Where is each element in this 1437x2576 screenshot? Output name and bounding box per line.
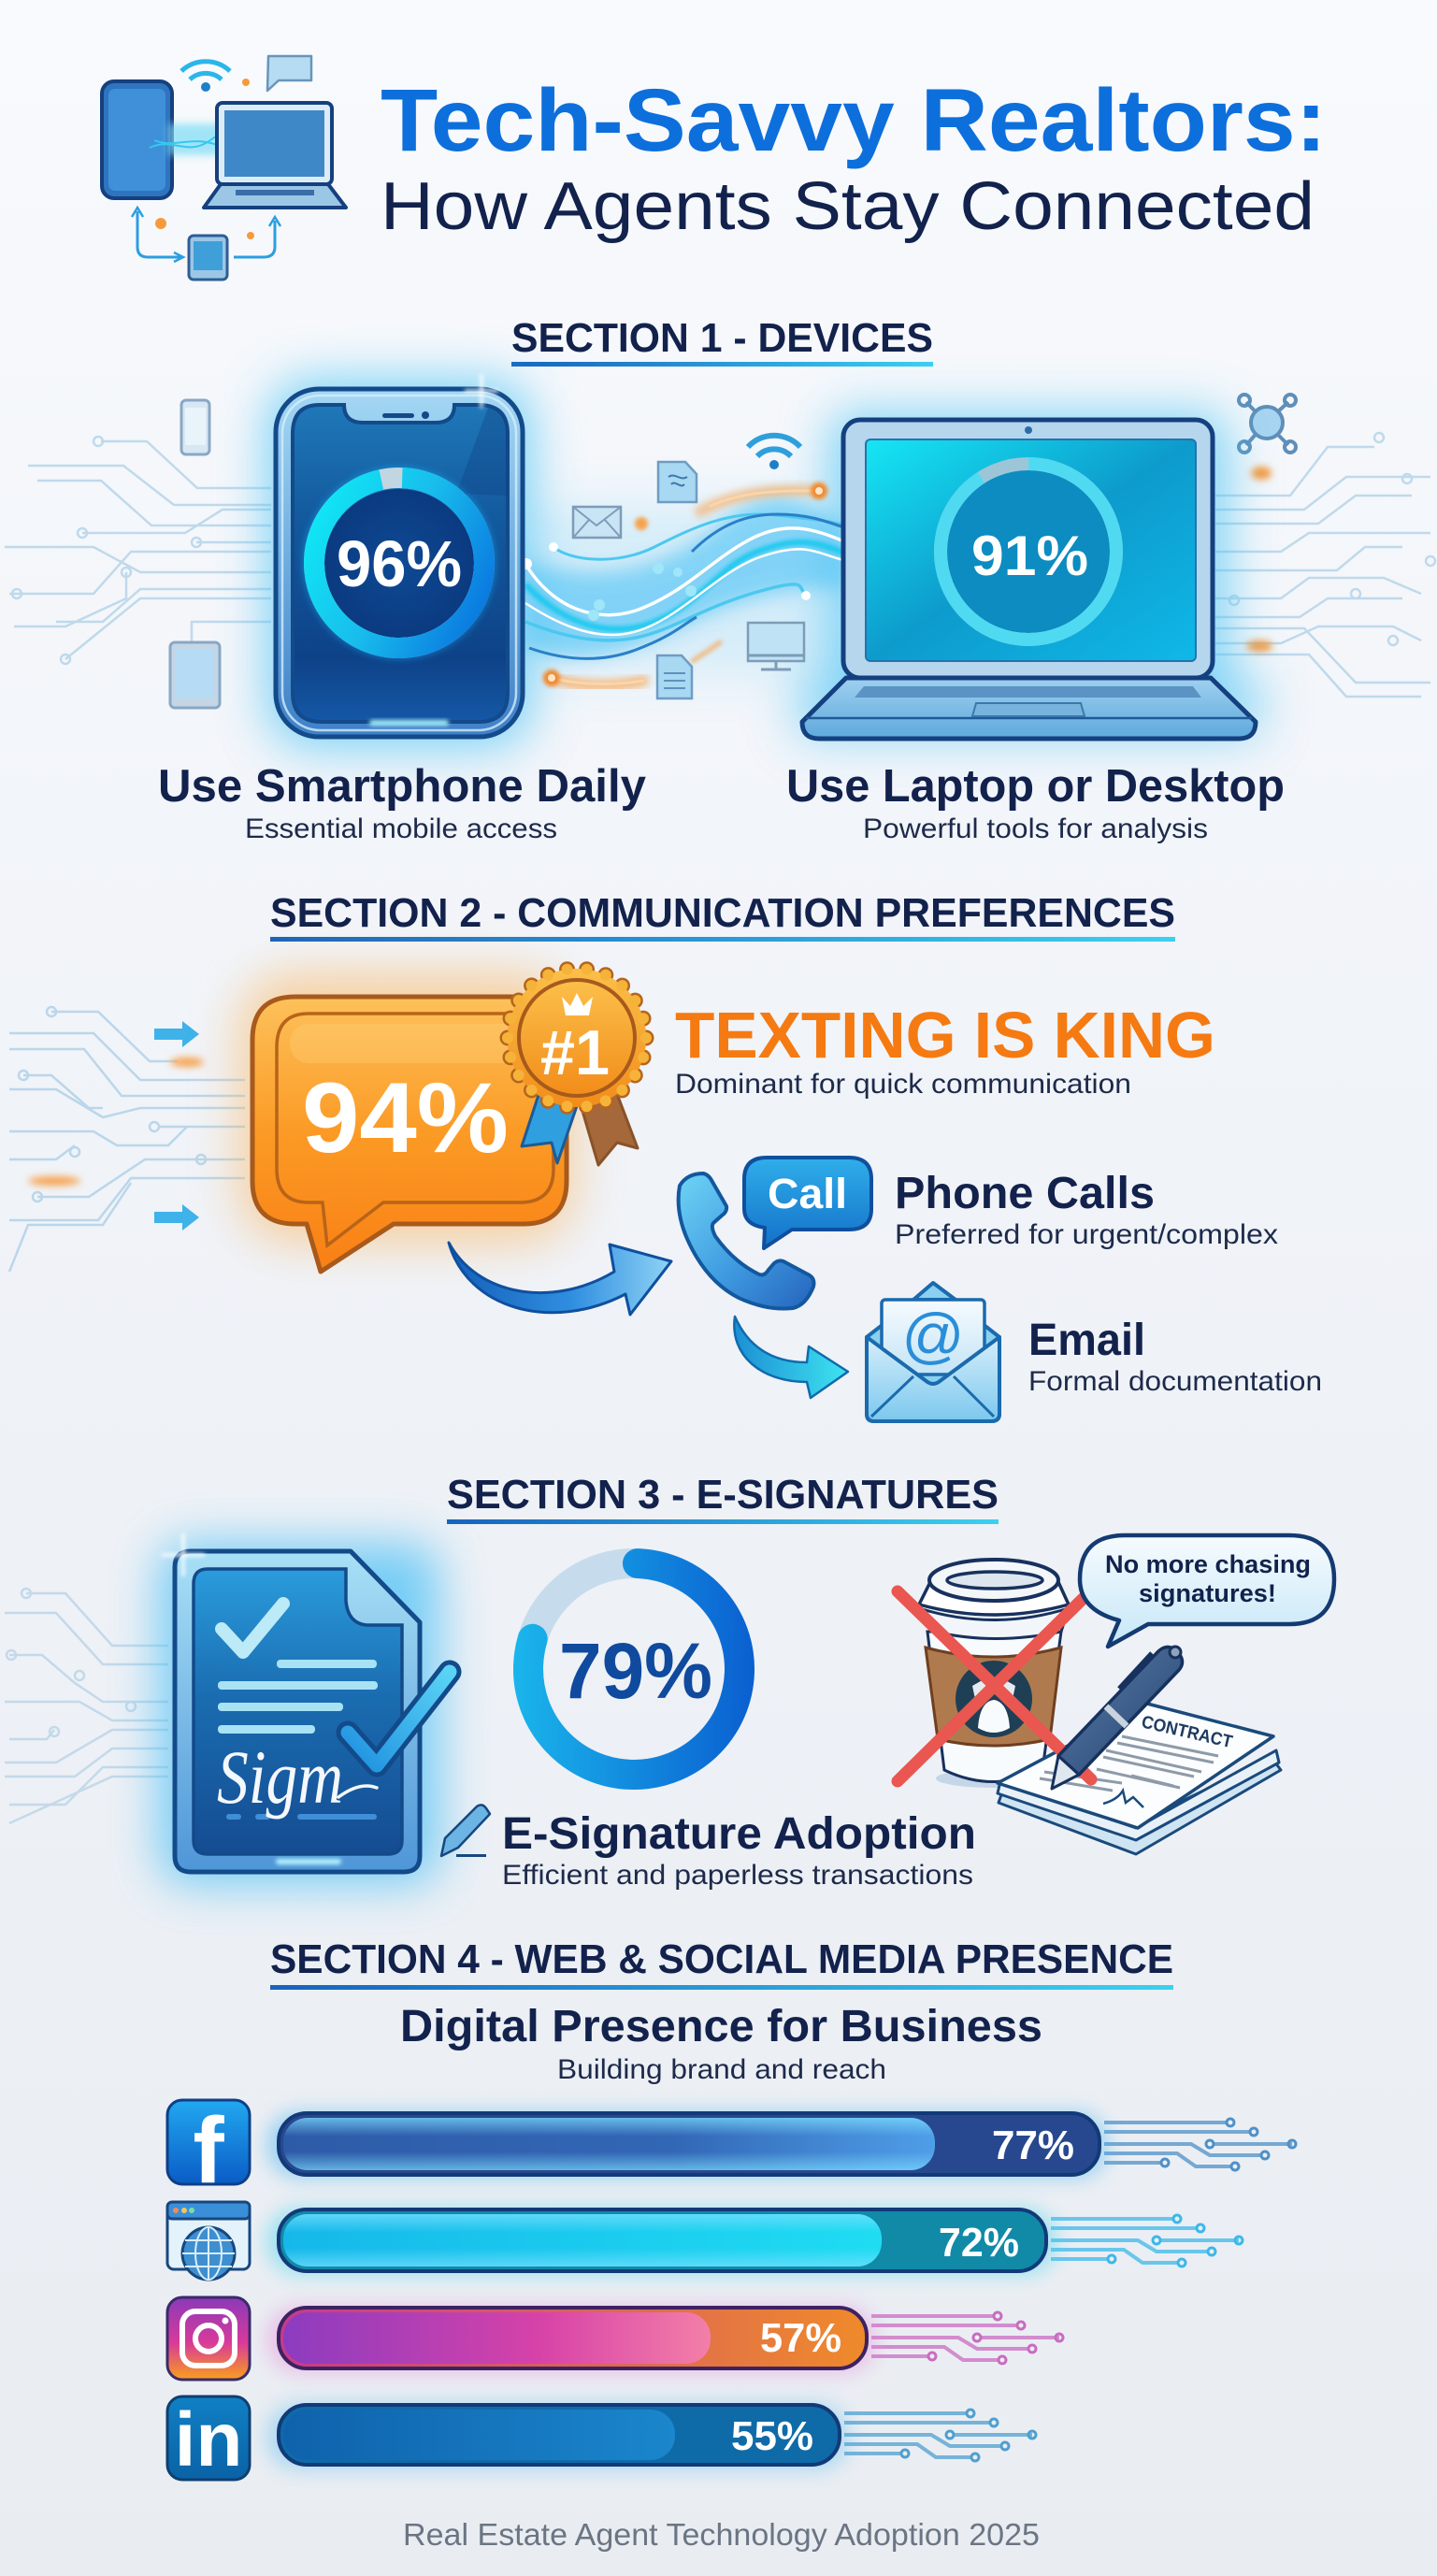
- icon: wifi: [181, 62, 230, 92]
- text: phone calls: Preferred for urgent/complex: [895, 1219, 1278, 1250]
- checkmark: [222, 1604, 283, 1652]
- row: Website 72%: 72%: [939, 2220, 1019, 2266]
- signature: Sigm: [217, 1734, 343, 1820]
- big check: [348, 1672, 450, 1765]
- icon: email envelope: @: [901, 1301, 965, 1370]
- glow: document: [159, 1543, 439, 1884]
- crown: [562, 993, 593, 1015]
- row: Facebook 77%: 77%: [992, 2123, 1074, 2168]
- icon: facebook: [167, 2098, 250, 2203]
- call bubble: [744, 1158, 871, 1248]
- laptop: 91%: [802, 420, 1256, 739]
- icon: chat bubble: [267, 56, 311, 91]
- icon: linkedin: in: [175, 2397, 242, 2482]
- arrows: device sync: [132, 208, 280, 262]
- speech bubble: 94%: [252, 997, 567, 1272]
- label: laptop: Powerful tools for analysis: [863, 813, 1208, 844]
- bar chart: digital presence: [167, 2098, 1296, 2482]
- orange sparks: [28, 1058, 204, 1186]
- callout: no more chasing: [1080, 1535, 1334, 1647]
- row: LinkedIn 55%: 55%: [731, 2413, 813, 2459]
- heading: section 4: SECTION 4 - WEB & SOCIAL MEDIA PRESENCE: [270, 1936, 1173, 1982]
- icon: envelope: [573, 507, 621, 538]
- arrow: to email: [734, 1317, 848, 1398]
- title: [381, 71, 1327, 244]
- progress ring 91%: [941, 464, 1116, 640]
- value 91%: 91%: [971, 525, 1088, 587]
- value 96%: 96%: [337, 527, 462, 600]
- icon: small phone: [102, 81, 172, 198]
- icon: phone handset: [679, 1173, 813, 1309]
- text: phone calls: [895, 1169, 1278, 1250]
- illustration: coffee cup: [919, 1560, 1069, 1788]
- orange dots: [155, 79, 254, 239]
- icon: document: [658, 462, 697, 502]
- text: e-signature adoption: E-Signature Adoption: [502, 1809, 976, 1859]
- donut chart: 79%: [525, 1560, 743, 1778]
- panel: e-signatures: [5, 1533, 1334, 1891]
- text: e-signature adoption: [502, 1809, 976, 1891]
- row: Instagram 57%: 57%: [760, 2315, 841, 2361]
- arrow: to phone: [449, 1243, 671, 1315]
- label: smartphone: Essential mobile access: [245, 813, 557, 844]
- icon: small laptop: [204, 103, 346, 208]
- callout: no more chasing: signatures!: [1139, 1579, 1276, 1607]
- label: smartphone: [158, 761, 646, 844]
- illustration: contract stack: CONTRACT: [1140, 1712, 1234, 1752]
- row: Instagram 57%: [167, 2297, 1063, 2380]
- illustration: pen: [1052, 1647, 1182, 1789]
- icon: instagram: [167, 2297, 250, 2380]
- text lines: [218, 1660, 378, 1734]
- heading: texting is king: TEXTING IS KING: [675, 999, 1215, 1072]
- icon: website: [167, 2202, 250, 2280]
- row: LinkedIn 55%: [167, 2396, 1036, 2482]
- icon: data link: [150, 123, 236, 155]
- heading: section 3: SECTION 3 - E-SIGNATURES: [447, 1472, 999, 1518]
- text: email: Formal documentation: [1028, 1366, 1322, 1397]
- circuit lines right: [1215, 433, 1435, 697]
- progress ring 96%: [303, 467, 496, 659]
- arrows incoming: [154, 1021, 199, 1230]
- data stream: [521, 496, 846, 658]
- badge: #1: [508, 969, 646, 1165]
- panel: devices: [5, 374, 1435, 844]
- circuit lines: [5, 1589, 168, 1823]
- donut chart: 79%: 79%: [559, 1627, 712, 1715]
- label: laptop: Use Laptop or Desktop: [786, 761, 1285, 812]
- icon: monitor: [748, 623, 804, 669]
- smartphone: 96%: [276, 374, 523, 737]
- icon: tablet left: [170, 642, 220, 708]
- text: e-signature adoption: Efficient and paperless transactions: [502, 1860, 973, 1891]
- label: smartphone: Use Smartphone Daily: [158, 761, 646, 812]
- text: email: Email: [1028, 1316, 1145, 1365]
- text lines: [1040, 1736, 1218, 1791]
- red cross: [898, 1591, 1091, 1781]
- orange streaks: [543, 482, 827, 686]
- icon: pencil: [441, 1805, 490, 1857]
- icon: wifi: [748, 436, 800, 469]
- glows behind devices: [266, 379, 1262, 748]
- orange sparks: [1246, 467, 1272, 652]
- icon: small phone left: [181, 400, 209, 454]
- row: Facebook 77%: [167, 2098, 1296, 2203]
- row: Website 72%: [167, 2202, 1243, 2280]
- icon: document 2: [657, 655, 692, 698]
- icon: e-sign document: [162, 1533, 450, 1872]
- title: Tech-Savvy Realtors:: [381, 71, 1327, 170]
- illustration: contract stack: [998, 1704, 1281, 1854]
- subheading: digital presence: Building brand and reach: [557, 2054, 886, 2085]
- subheading: digital presence: Digital Presence for Business: [400, 2002, 1042, 2051]
- title: How Agents Stay Connected: [381, 169, 1315, 244]
- text: phone calls: Phone Calls: [895, 1169, 1155, 1218]
- icon: small tablet: [189, 236, 227, 280]
- panel: communication preferences: [9, 969, 1322, 1421]
- icon: facebook: f: [193, 2098, 224, 2203]
- label: laptop: [786, 761, 1285, 844]
- circuit lines left: [5, 437, 271, 664]
- glow: orange: [238, 972, 575, 1244]
- subheading: digital presence: [400, 2002, 1042, 2085]
- heading: section 2: SECTION 2 - COMMUNICATION PREFERENCES: [270, 890, 1175, 936]
- circuit lines: [9, 1007, 245, 1272]
- icon: email envelope: [867, 1283, 999, 1421]
- ribbons: [522, 1089, 638, 1165]
- logo: [956, 1661, 1032, 1737]
- footer source: Real Estate Agent Technology Adoption 2025: [403, 2517, 1040, 2552]
- badge: #1: #1: [540, 1017, 610, 1088]
- heading: section 1: SECTION 1 - DEVICES: [511, 315, 933, 361]
- heading: texting is king: Dominant for quick communication: [675, 1069, 1131, 1100]
- callout: no more chasing: No more chasing: [1105, 1550, 1311, 1578]
- header icon: connected devices: [102, 56, 346, 280]
- speech bubble: 94%: 94%: [302, 1061, 509, 1173]
- icon: network nodes: [1239, 395, 1296, 453]
- call bubble: Call: [768, 1170, 847, 1217]
- text: email: [1028, 1316, 1322, 1397]
